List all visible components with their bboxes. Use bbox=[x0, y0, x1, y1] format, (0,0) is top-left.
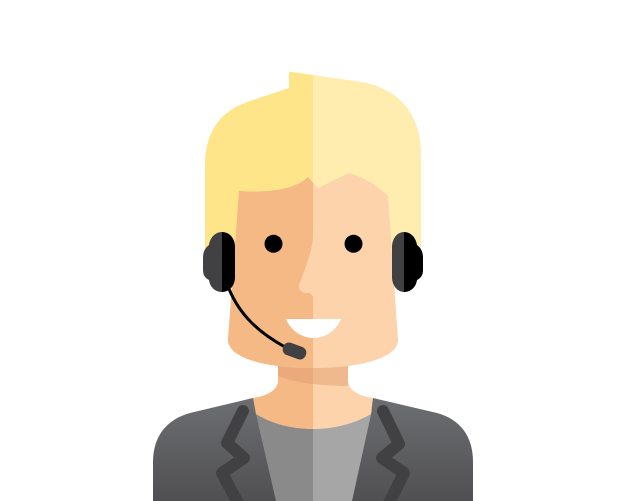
headset: microphone boom bbox=[229, 289, 285, 347]
shirt bbox=[255, 410, 372, 501]
hair bbox=[205, 72, 421, 252]
headset: right ear cup bbox=[392, 232, 423, 292]
jacket lapels bbox=[222, 411, 404, 501]
neck shadow bbox=[278, 360, 348, 386]
face bbox=[228, 173, 398, 368]
eyes bbox=[264, 235, 362, 253]
headset: microphone bbox=[281, 341, 308, 361]
jacket bbox=[153, 398, 473, 501]
mouth bbox=[286, 319, 341, 338]
neck and chest bbox=[253, 360, 373, 429]
headset: left ear cup bbox=[203, 232, 235, 292]
